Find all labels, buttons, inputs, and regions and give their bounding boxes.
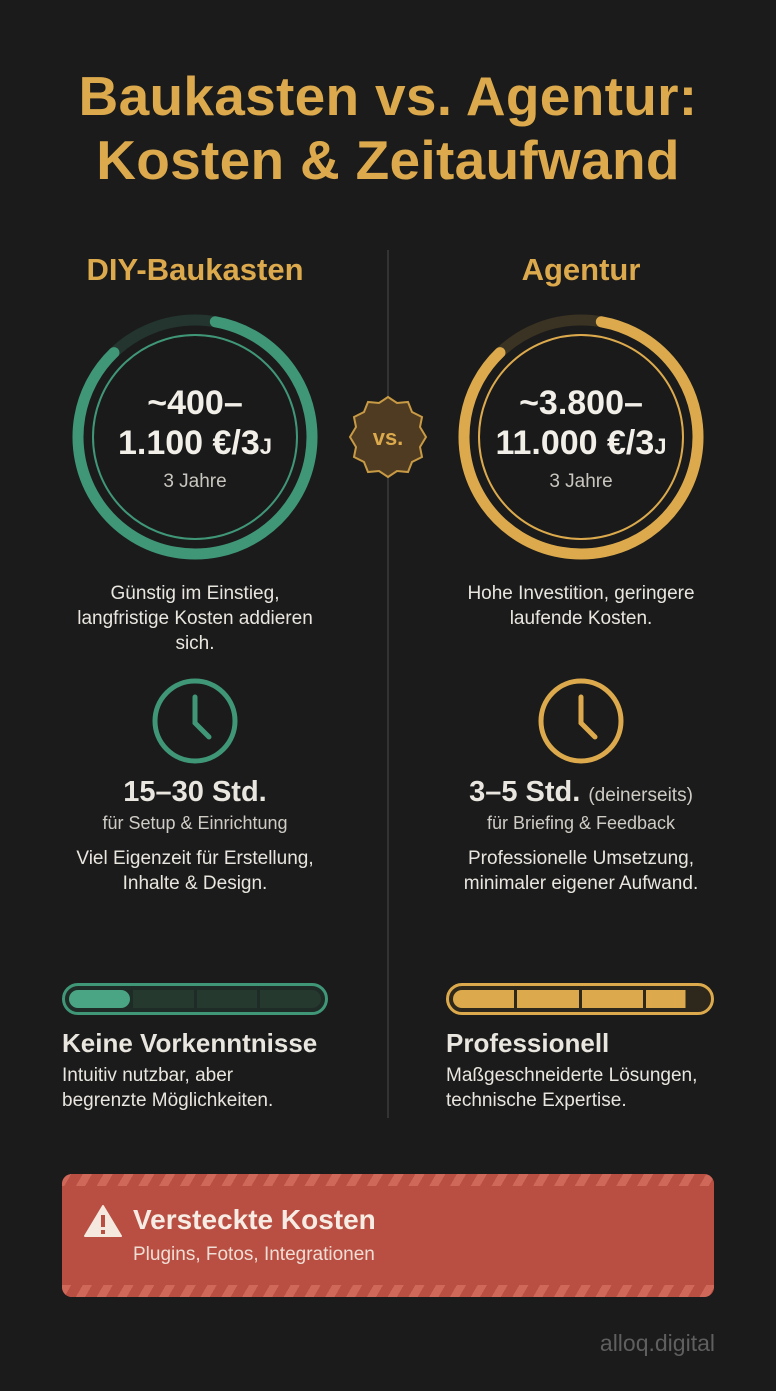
ring: DIY cost [59,301,331,573]
callout: hidden costs: Plugins, Fotos, Integrationen [133,1244,375,1265]
text: Agentur cost description: laufende Kosten. [510,608,652,629]
ring: DIY cost: ~400– [147,384,243,422]
icon: clock gold [538,678,624,764]
text: DIY skill: Keine Vorkenntnisse [62,1028,317,1058]
chart: cost rings [72,314,704,560]
icon: warning [84,1205,122,1237]
title [79,65,697,191]
divider [387,250,389,1118]
text: DIY time: für Setup & Einrichtung [102,813,288,833]
text: Agentur cost description: Hohe Investition, geringere [467,583,695,604]
text: Agentur time: Professionelle Umsetzung, [468,848,694,869]
text: DIY cost description: Günstig im Einstieg, [111,583,279,604]
bar: Agentur skill [446,983,714,1015]
badge: vs: vs. [373,425,403,450]
text: DIY skill: Intuitiv nutzbar, aber [62,1065,233,1086]
text: Agentur skill: technische Expertise. [446,1090,627,1111]
text: DIY cost description: langfristige Kosten addieren [77,608,313,629]
callout: hidden costs [62,1174,714,1297]
text: Agentur skill [446,1028,697,1111]
ring: DIY cost: 3 Jahre [163,471,227,492]
ring: Agentur cost [445,301,717,573]
text: DIY time [76,776,314,894]
text: Agentur skill: Maßgeschneiderte Lösungen, [446,1065,697,1086]
callout: hidden costs: Versteckte Kosten [133,1204,376,1235]
ring: Agentur cost: 3 Jahre [549,471,613,492]
text: DIY time: Viel Eigenzeit für Erstellung, [76,848,314,869]
text: DIY time: Inhalte & Design. [123,873,267,894]
heading: Agentur: Agentur [522,252,640,287]
text: DIY skill: begrenzte Möglichkeiten. [62,1090,273,1111]
text: DIY skill [62,1028,317,1111]
icon: clock green [152,678,238,764]
bar: DIY skill [62,983,328,1015]
footer: brand: alloq.digital [600,1330,715,1356]
title: Baukasten vs. Agentur: [79,65,697,127]
text: DIY cost description: sich. [175,633,215,654]
text: DIY time: 15–30 Std. [123,776,267,808]
badge: vs [350,397,426,477]
text: Agentur skill: Professionell [446,1028,609,1058]
heading: DIY: DIY-Baukasten [86,252,304,287]
text: Agentur time [464,776,698,894]
ring: Agentur cost: ~3.800– [519,384,643,422]
ring: DIY cost: 1.100 €/3J [118,424,272,462]
title: Kosten & Zeitaufwand [96,129,680,191]
text: Agentur time: minimaler eigener Aufwand. [464,873,698,894]
text: Agentur time: 3–5 Std. (deinerseits) [469,776,693,808]
ring: Agentur cost: 11.000 €/3J [495,424,667,462]
text: DIY cost description [77,583,313,654]
text: Agentur cost description [467,583,695,629]
text: Agentur time: für Briefing & Feedback [487,813,675,833]
